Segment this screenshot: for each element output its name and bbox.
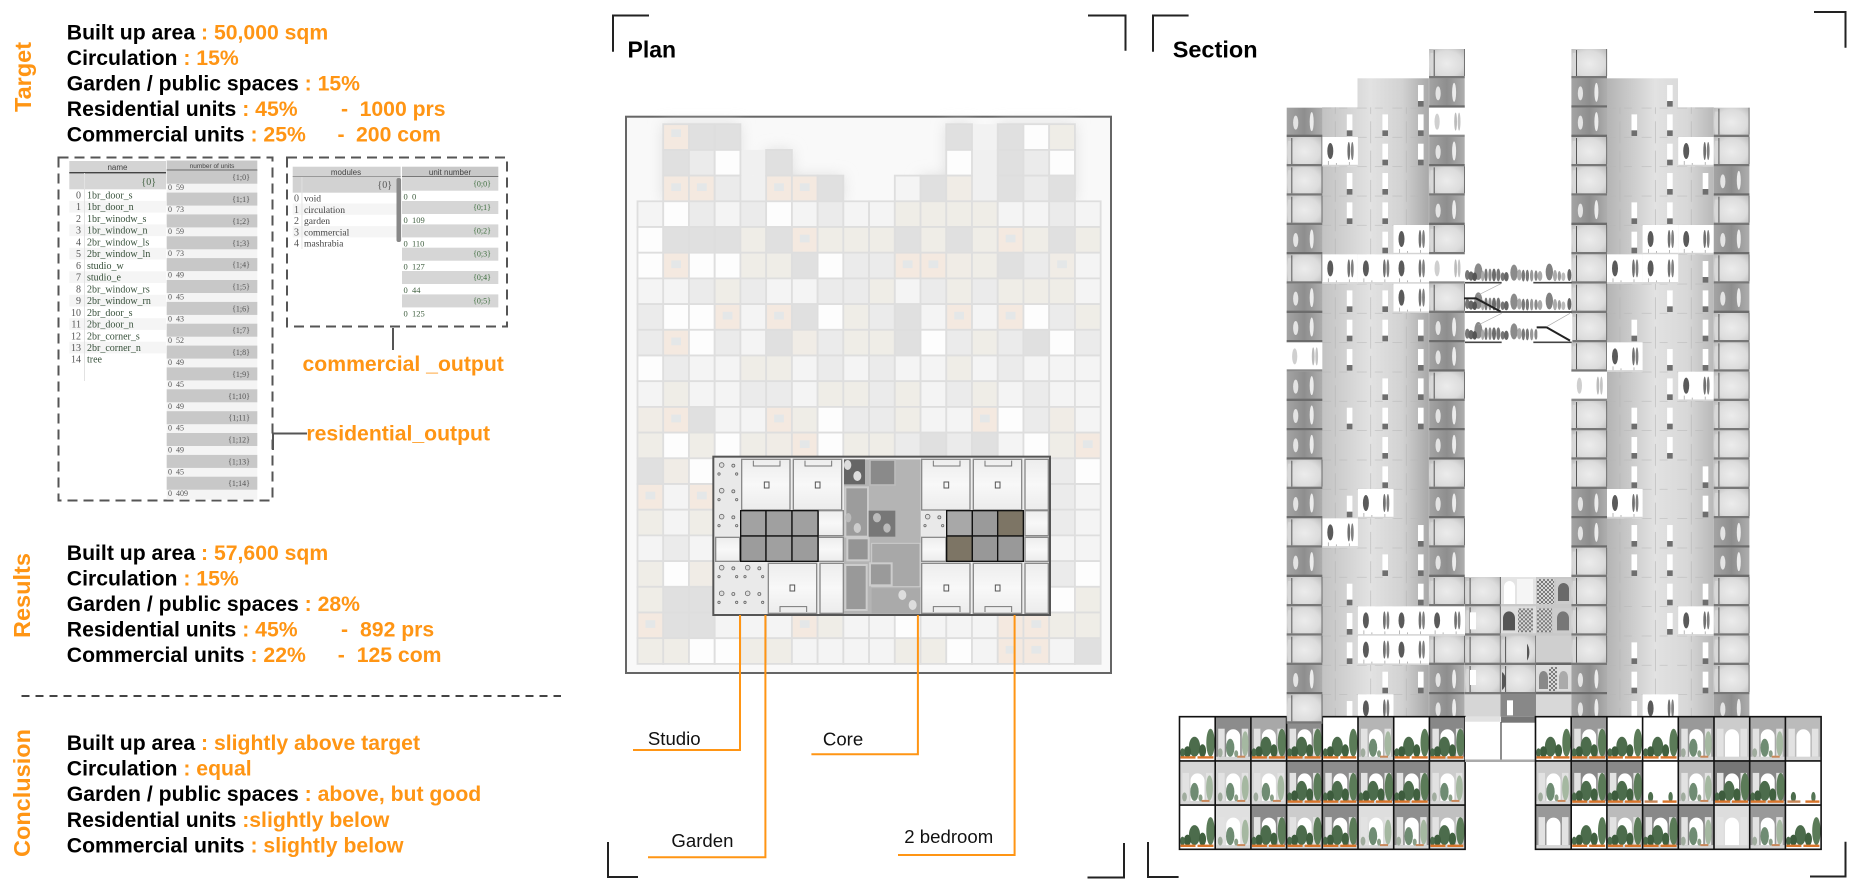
number of units column: 0 73	[168, 205, 184, 214]
panel: results	[9, 542, 442, 667]
callout: 2 bedroom: 2 bedroom	[904, 826, 993, 847]
residential output table	[58, 158, 272, 500]
gray units	[741, 511, 1023, 561]
name column: 14	[71, 355, 81, 366]
text block: target metrics: -	[341, 98, 348, 121]
text block: result metrics: Circulation : 15%	[67, 568, 239, 590]
text block: target metrics: Garden / public spaces : 15%	[67, 72, 360, 96]
name column: 0	[76, 190, 81, 202]
name column: name	[107, 163, 128, 172]
plan frame	[626, 117, 1111, 673]
tower walls	[1322, 78, 1714, 723]
modules column: garden	[304, 216, 330, 227]
heading: Section: Section	[1173, 36, 1258, 62]
number of units column: 0 49	[168, 358, 184, 367]
number of units column	[167, 160, 257, 500]
number of units column: 0 43	[168, 314, 184, 323]
number of units column: number of units	[190, 163, 235, 170]
heading: Results: Results	[9, 553, 35, 638]
corner brackets	[1148, 12, 1846, 877]
number of units column: {1;9}	[232, 370, 250, 379]
text block: conclusion metrics: Circulation : equal	[67, 758, 252, 780]
connector: commercial output	[392, 328, 394, 350]
right tower modules	[1571, 49, 1750, 724]
number of units column: 0 59	[168, 227, 184, 236]
left tower modules	[1287, 49, 1465, 724]
modules column: {0}	[377, 180, 392, 191]
callout: Garden: Garden	[671, 830, 733, 851]
unit number column: {0;4}	[473, 273, 491, 282]
panel: target	[10, 22, 507, 500]
number of units column: {1;8}	[232, 348, 250, 357]
name column: 10	[71, 308, 81, 319]
name column: studio_w	[87, 261, 124, 272]
detailed floor plan block	[713, 457, 1050, 615]
number of units column: {1;2}	[232, 217, 250, 226]
text block: result metrics: 892 prs	[360, 618, 434, 642]
number of units column: {1;6}	[232, 304, 250, 313]
corner brackets	[608, 16, 1126, 878]
number of units column: 0 409	[168, 489, 188, 498]
middle link at podium level	[1465, 717, 1536, 762]
number of units column: 0 45	[168, 380, 184, 389]
text block: target metrics: Residential units : 45%	[67, 98, 298, 121]
modules column: 4	[294, 239, 299, 250]
central commercial modules	[1465, 577, 1571, 724]
modules column	[293, 167, 401, 250]
name column: 2br_window_rn	[87, 296, 151, 307]
number of units column: {1;10}	[228, 392, 250, 401]
sky bridges with trees	[1464, 263, 1572, 342]
text block: result metrics: 125 com	[357, 644, 442, 667]
name column: 2br_window_ls	[87, 237, 149, 248]
text block: conclusion metrics: Garden / public spaces : above, but good	[67, 783, 481, 806]
number of units column: {1;4}	[232, 261, 250, 270]
name column: 8	[76, 284, 81, 295]
panel: conclusion	[9, 729, 481, 858]
name column: 2br_door_s	[87, 308, 133, 319]
name column: 1br_window_n	[87, 226, 148, 237]
name column: 5	[76, 249, 81, 260]
name column: 6	[76, 261, 81, 272]
number of units column: 0 73	[168, 249, 184, 258]
unit number column: 0 0	[404, 192, 416, 202]
modules column: circulation	[304, 205, 345, 216]
modules column: 2	[294, 216, 299, 227]
name column: 2	[76, 214, 81, 225]
number of units column: {1;0}	[232, 173, 250, 182]
number of units column: {1;5}	[232, 282, 250, 292]
heading: Target: Target	[10, 42, 36, 112]
unit number column: {0;0}	[473, 180, 491, 189]
text block: result metrics: Garden / public spaces : 28%	[67, 593, 360, 616]
heading: Conclusion: Conclusion	[9, 729, 35, 857]
unit number column: {0;1}	[473, 203, 491, 212]
callout: 2 bedroom	[898, 615, 1015, 855]
number of units column: 0 49	[168, 402, 184, 411]
unit number column: {0;2}	[473, 226, 491, 235]
unit number column: 0 127	[404, 262, 425, 272]
unit number column: 0 125	[404, 308, 425, 318]
apartment rooms	[716, 459, 1048, 613]
text block: conclusion metrics	[67, 732, 481, 858]
dashed frame	[58, 158, 272, 500]
number of units column: 0 45	[168, 292, 184, 302]
dashed frame	[287, 158, 507, 326]
name column: 2br_corner_n	[87, 343, 141, 354]
label: commercial output: commercial _output	[302, 353, 504, 376]
overlapping tower module	[1287, 694, 1322, 724]
garden areas	[715, 458, 947, 613]
modules column: commercial	[304, 227, 350, 238]
name column: 12	[71, 331, 81, 342]
text block: target metrics	[67, 22, 446, 146]
callout: Studio: Studio	[648, 728, 701, 749]
text block: target metrics: -	[338, 124, 345, 146]
modules column: void	[304, 194, 321, 204]
unit number column: 0 110	[404, 238, 424, 248]
name column: 2br_window_rs	[87, 284, 150, 295]
soft shadow behind upper modules	[663, 124, 1075, 201]
number of units column: 0 52	[168, 336, 184, 345]
modules column: mashrabia	[304, 239, 344, 250]
panel: plan	[608, 16, 1126, 878]
commercial output table	[287, 158, 507, 326]
text block: target metrics: 200 com	[356, 124, 441, 146]
modules column: 1	[294, 205, 299, 216]
name column: 7	[76, 273, 81, 284]
right podium with garden units	[1536, 717, 1821, 849]
name column: 1br_door_n	[87, 202, 134, 213]
text block: conclusion metrics: Residential units :slightly below	[67, 809, 390, 832]
text block: target metrics: 1000 prs	[360, 98, 446, 121]
name column: 11	[71, 320, 81, 330]
text block: target metrics: Circulation : 15%	[67, 47, 239, 70]
name column: 1br_door_s	[87, 190, 133, 202]
text block: result metrics: Residential units : 45%	[67, 618, 298, 642]
number of units column: 0 49	[168, 446, 184, 454]
left podium with garden units	[1180, 717, 1465, 849]
text block: result metrics	[67, 542, 442, 667]
text block: target metrics: Built up area : 50,000 sqm	[67, 22, 328, 44]
text block: result metrics: Built up area : 57,600 sqm	[67, 542, 328, 565]
number of units column: {1;3}	[232, 239, 250, 248]
text block: conclusion metrics: Built up area : slightly above target	[67, 732, 420, 755]
text block: conclusion metrics: Commercial units : slightly below	[67, 834, 404, 858]
number of units column: 0 45	[168, 424, 184, 433]
name column: {0}	[141, 177, 156, 188]
name column: tree	[87, 355, 103, 366]
outer wall	[713, 457, 1050, 615]
number of units column: 0 49	[168, 271, 184, 280]
unit number column: 0 44	[404, 285, 421, 295]
callout: Core	[811, 615, 918, 754]
heading: Plan: Plan	[628, 36, 676, 62]
unit number column: {0;5}	[473, 296, 491, 305]
name column: 4	[76, 237, 81, 248]
callout: Core: Core	[823, 729, 863, 750]
callout: Studio	[633, 615, 740, 750]
name column: 2br_corner_s	[87, 331, 140, 342]
name column: 9	[76, 296, 81, 307]
number of units column: {1;13}	[228, 457, 250, 466]
label: residential output: residential_output	[306, 422, 490, 446]
text block: target metrics: Commercial units : 25%	[67, 124, 306, 146]
connector: residential output	[273, 434, 307, 450]
name column: 2br_door_n	[87, 320, 134, 330]
number of units column: {1;1}	[232, 195, 250, 204]
name column: 1br_winodw_s	[87, 214, 147, 225]
unit number column	[402, 167, 498, 318]
modules column: modules	[331, 168, 361, 177]
panel: section	[1148, 12, 1846, 877]
text block: result metrics: Commercial units : 22%	[67, 644, 306, 667]
name column: 13	[71, 343, 81, 354]
number of units column: 0 45	[168, 467, 184, 476]
modules column: 0	[294, 194, 299, 204]
room fixtures	[753, 461, 1012, 612]
number of units column: {1;7}	[232, 326, 250, 335]
name column: studio_e	[87, 273, 121, 284]
core	[844, 459, 921, 614]
unit number column: 0 109	[404, 215, 425, 225]
name column: 2br_window_ln	[87, 249, 150, 260]
name column: 3	[76, 226, 81, 237]
number of units column: {1;14}	[228, 479, 250, 488]
name column	[69, 161, 166, 381]
number of units column: {1;11}	[228, 414, 250, 423]
unit number column: {0;3}	[473, 250, 491, 259]
plan grid of modules	[638, 124, 1101, 664]
unit number column: unit number	[429, 168, 471, 177]
text block: result metrics: -	[338, 644, 345, 667]
text block: result metrics: -	[341, 618, 348, 642]
number of units column: {1;12}	[228, 436, 250, 444]
callout: Garden	[648, 615, 765, 857]
number of units column: 0 59	[168, 183, 184, 192]
modules column: 3	[294, 227, 299, 238]
name column: 1	[76, 202, 81, 213]
